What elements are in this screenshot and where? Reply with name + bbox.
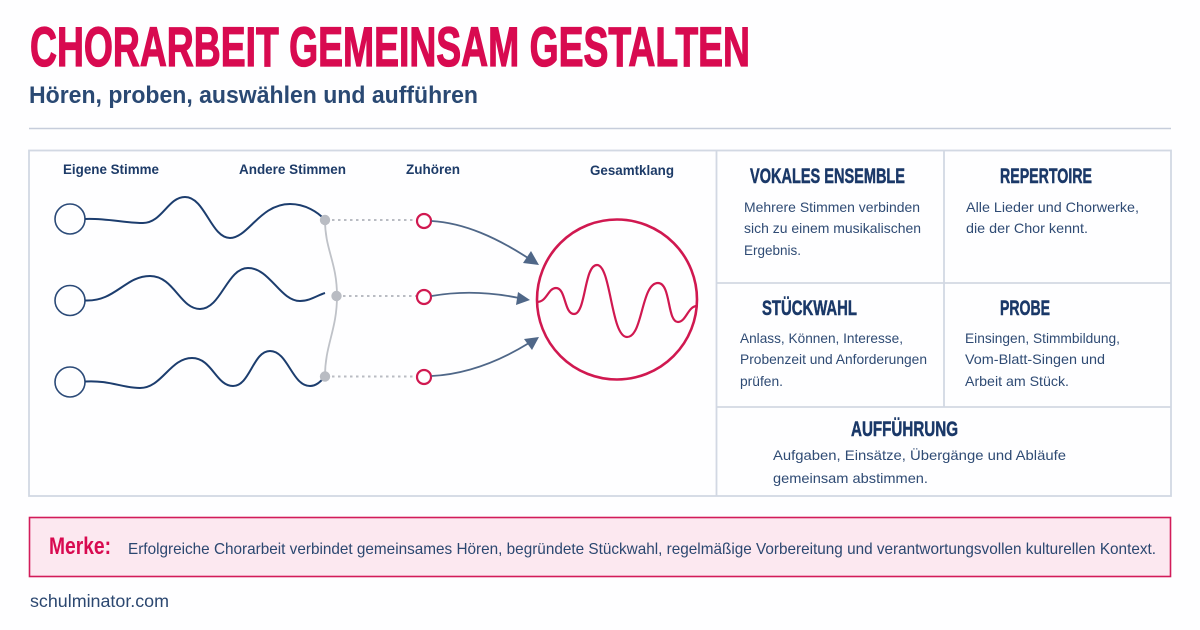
text: Arbeit am Stück.	[965, 373, 1069, 389]
text: Probenzeit und Anforderungen	[740, 351, 927, 367]
label: Gesamtklang: Gesamtklang	[590, 162, 674, 178]
text: gemeinsam abstimmen.	[773, 470, 928, 486]
label: Zuhören: Zuhören	[406, 161, 460, 177]
heading: AUFFÜHRUNG	[851, 418, 958, 441]
grid lines	[716, 150, 1171, 496]
text: die der Chor kennt.	[966, 220, 1088, 236]
text	[773, 446, 1066, 486]
text	[965, 330, 1120, 389]
panel: voices diagram	[55, 161, 697, 397]
text: Alle Lieder und Chorwerke,	[966, 199, 1139, 215]
text: Ergebnis.	[744, 242, 801, 258]
icon: overall sound circle with wave	[537, 220, 697, 380]
icon: listening points	[417, 214, 431, 384]
text	[966, 199, 1139, 236]
panel: Aufführung	[773, 418, 1066, 486]
heading: VOKALES ENSEMBLE	[750, 165, 905, 188]
arrows to overall sound	[432, 221, 539, 376]
dotted lines to listening points	[332, 220, 416, 376]
voice waves	[85, 197, 325, 388]
text: Mehrere Stimmen verbinden	[744, 199, 920, 215]
label: Andere Stimmen: Andere Stimmen	[239, 161, 346, 177]
label: Eigene Stimme: Eigene Stimme	[63, 161, 159, 177]
icon: voice circles	[55, 204, 85, 397]
heading: STÜCKWAHL	[762, 297, 857, 320]
heading: REPERTOIRE	[1000, 165, 1092, 188]
panel: Probe	[965, 297, 1120, 389]
callout text: Erfolgreiche Chorarbeit verbindet gemeinsames Hören, begründete Stückwahl, regelmäßige Vorbereitung und verantwortungsvollen kulturellen Kontext.	[128, 541, 1156, 558]
text	[740, 330, 927, 389]
text: Aufgaben, Einsätze, Übergänge und Abläufe	[773, 446, 1066, 463]
panel: Repertoire	[966, 165, 1139, 236]
text: Vom-Blatt-Singen und	[965, 351, 1105, 367]
title: CHORARBEIT GEMEINSAM GESTALTEN	[30, 15, 750, 78]
panel: Stückwahl	[740, 297, 927, 389]
heading: PROBE	[1000, 297, 1050, 320]
panel: diagram frame	[29, 150, 1171, 496]
callout label: Merke:	[49, 533, 111, 560]
panel: Vokales Ensemble	[744, 165, 921, 258]
callout: Merke	[30, 518, 1170, 576]
subtitle: Hören, proben, auswählen und aufführen	[29, 82, 478, 109]
gray connector between voices	[320, 215, 342, 382]
text: sich zu einem musikalischen	[744, 220, 921, 236]
text: Anlass, Können, Interesse,	[740, 330, 903, 346]
text: Einsingen, Stimmbildung,	[965, 330, 1120, 346]
text: prüfen.	[740, 373, 783, 389]
text	[744, 199, 921, 258]
footer: source: schulminator.com	[30, 591, 169, 611]
